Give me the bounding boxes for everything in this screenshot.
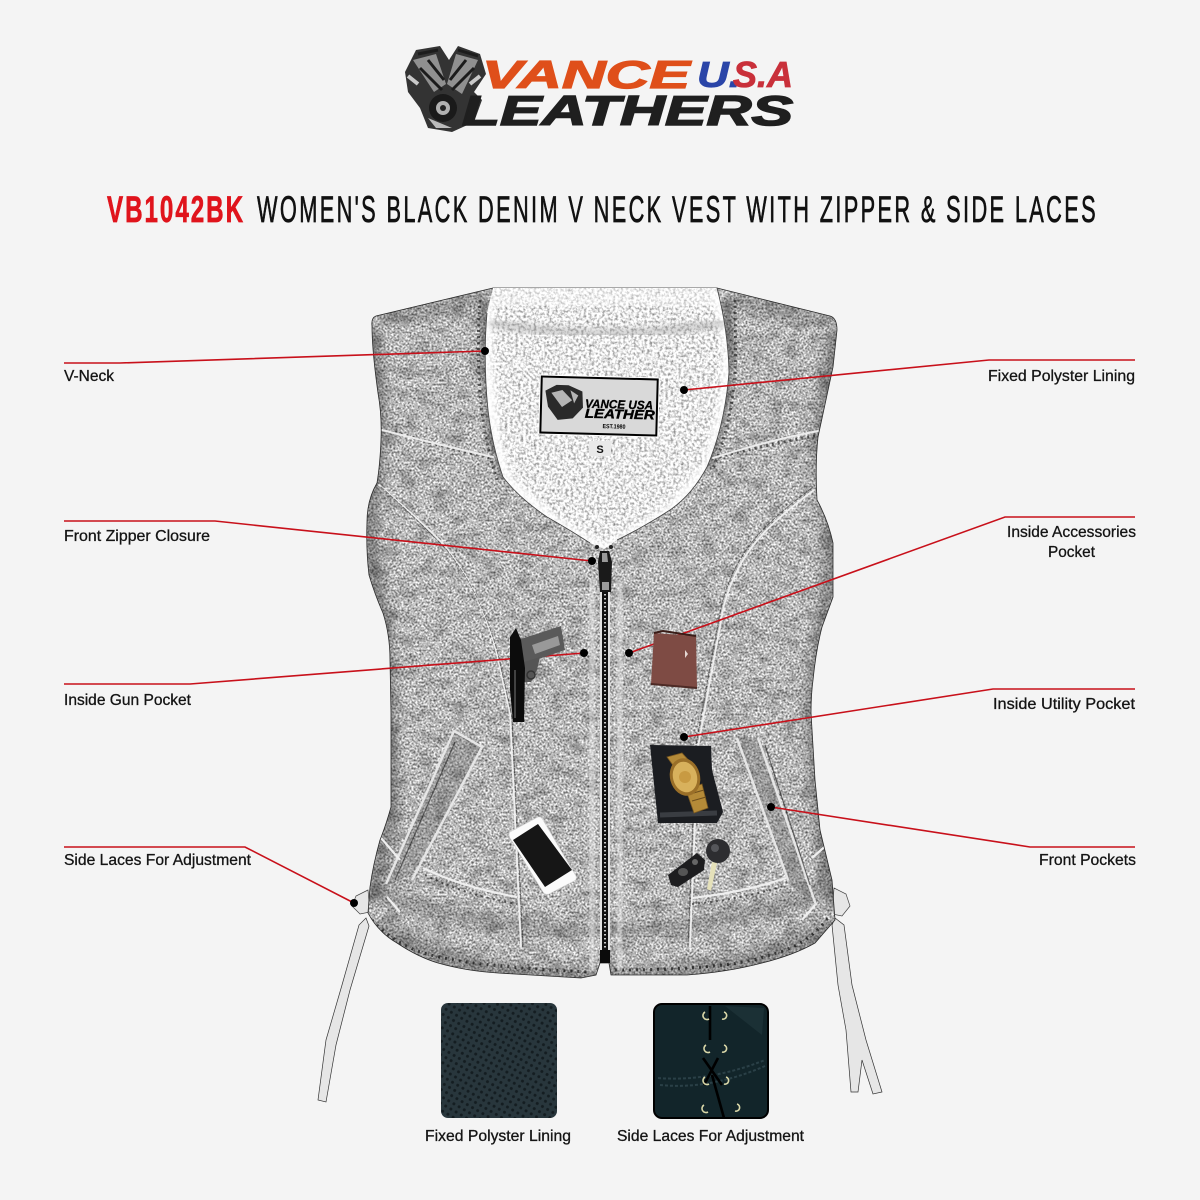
swatch: fixed polyester lining (441, 1003, 557, 1118)
side laces (318, 888, 882, 1102)
swatch lacing (703, 1006, 724, 1118)
hem stitching (372, 915, 830, 972)
left lace (318, 918, 369, 1102)
icon: pistol (510, 626, 565, 722)
watch strap (667, 753, 708, 813)
vest (355, 280, 845, 985)
pouch (650, 745, 723, 823)
label: Inside Accessories Pocket (1007, 524, 1136, 561)
label: Inside Gun Pocket: Inside Gun Pocket (64, 692, 192, 709)
swatch: side laces (654, 1004, 768, 1118)
label: Front Zipper Closure: Front Zipper Closure (64, 528, 210, 545)
watch face (666, 755, 704, 799)
hem seam (381, 838, 830, 920)
seams (379, 430, 818, 947)
size tag (589, 441, 611, 456)
lining (480, 285, 735, 555)
wordmark: U.S.A: U. (697, 54, 741, 95)
icon: phone (509, 817, 576, 894)
callout labels (64, 368, 1136, 1145)
zipper (595, 545, 613, 963)
vest denim body (355, 280, 845, 985)
label: Inside Utility Pocket: Inside Utility Pocket (993, 696, 1136, 713)
vest outline (367, 288, 837, 978)
icon: wallet (651, 631, 697, 688)
lining edge (485, 288, 729, 543)
icon: engine (405, 46, 486, 132)
wordmark: LEATHERS: LEATHERS (462, 87, 793, 134)
leader dots (350, 347, 775, 907)
icon: watch in pouch (650, 745, 723, 823)
neck label (538, 374, 660, 438)
label: Fixed Polyster Lining: Fixed Polyster Lining (988, 368, 1135, 385)
logo: Vance USA Leathers (405, 46, 793, 134)
label: Inside Accessories Pocket: Pocket (1048, 544, 1096, 561)
wordmark: VANCE: VANCE (482, 54, 692, 97)
label: Front Pockets: Front Pockets (1039, 852, 1136, 869)
icon: car keys (668, 839, 730, 891)
right pocket welt (737, 736, 816, 905)
size tag: S (596, 444, 604, 456)
label text: VANCE USA (585, 397, 653, 412)
wordmark: U.S.A: S.A (733, 54, 793, 95)
label: V-Neck: V-Neck (64, 368, 115, 385)
caption: Fixed Polyster Lining: Fixed Polyster Lining (425, 1128, 571, 1145)
wordmark: U.S.A (697, 54, 793, 95)
label engine icon (545, 385, 584, 421)
neck label: LEATHER (585, 406, 656, 422)
lace knots (352, 888, 850, 916)
neck stitching (395, 300, 815, 480)
right lace (832, 918, 882, 1094)
placket shading (592, 580, 620, 970)
neck label: EST.1980 (602, 424, 626, 431)
title: product code: VB1042BK (107, 189, 245, 230)
lining mesh (480, 285, 735, 555)
swatch shading (725, 1006, 764, 1035)
swatch eyelets (702, 1012, 740, 1113)
label: Inside Accessories Pocket: Inside Accessories (1007, 524, 1136, 541)
label: Side Laces For Adjustment: Side Laces For Adjustment (64, 852, 252, 869)
caption: Side Laces For Adjustment: Side Laces For Adjustment (617, 1128, 805, 1145)
leader lines (64, 351, 1135, 903)
zipper pull (598, 551, 612, 592)
title (107, 189, 1098, 230)
callout lines and dots (64, 347, 1135, 907)
left pocket welt (384, 731, 482, 888)
